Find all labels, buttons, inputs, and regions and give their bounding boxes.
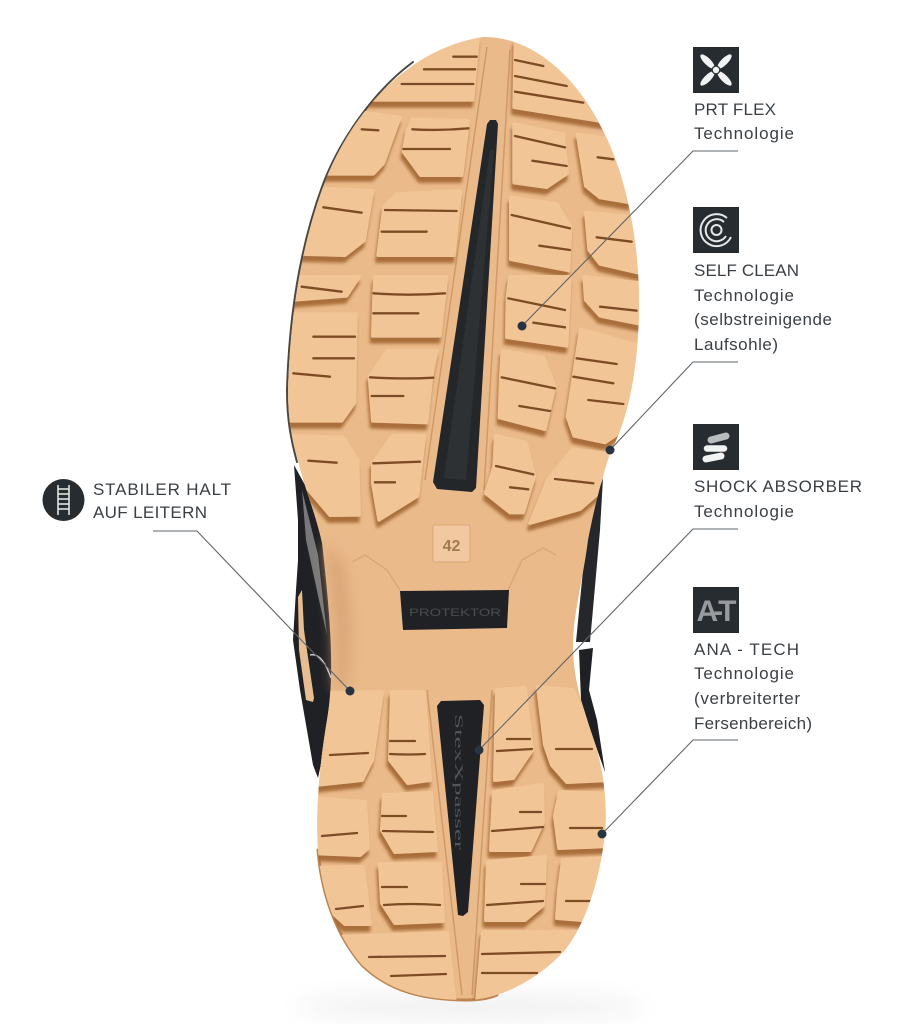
callout: PRT FLEX [518,47,794,330]
midfoot shading [324,540,556,690]
icon: PRT FLEX [693,47,739,93]
label: STABILER HALT: STABILER HALT [93,480,231,499]
black brand badge: PROTEKTOR [409,607,501,619]
label: PRT FLEX [694,100,794,143]
callout: ANA-TECH [598,587,812,838]
heel black spine: StexXpasser [452,714,466,850]
label: SHOCK ABSORBER: SHOCK ABSORBER [694,477,862,496]
size marker 42 [433,525,470,562]
ground shadow [295,997,645,1017]
tread lugs clipped to sole [282,37,643,1005]
label: PRT FLEX: Technologie [694,124,794,143]
forefoot black spine [433,120,498,492]
label: ANA-TECH: ANA - TECH [694,640,799,659]
label: ANA-TECH: (verbreiterter [694,689,800,708]
label: ANA-TECH: Technologie [694,664,794,683]
icon: SHOCK ABSORBER [693,424,739,470]
icon: SELF CLEAN [693,207,739,253]
forefoot tread upper part [293,37,643,274]
label: STABILER HALT [93,480,231,522]
label: PRT FLEX: PRT FLEX [694,100,776,119]
sole outline [288,37,639,1000]
callout: SELF CLEAN [606,207,832,454]
central channel lines [425,47,510,995]
label: SELF CLEAN: Technologie [694,286,794,305]
label: STABILER HALT: AUF LEITERN [93,503,207,522]
sole edge shading [287,62,497,1000]
icon: ANA-TECH [693,587,739,633]
size marker 42: 42 [443,538,460,555]
label: SHOCK ABSORBER [694,477,862,521]
label: ANA-TECH: Fersenbereich) [694,714,812,733]
icon: ladder [42,479,84,521]
heel black spine [437,700,484,916]
label: ANA-TECH [694,640,812,733]
label: SELF CLEAN: SELF CLEAN [694,261,799,280]
heel tread [310,687,612,1005]
label: SELF CLEAN: Laufsohle) [694,335,778,354]
forefoot tread lower part [282,277,643,523]
ladder strap [298,590,314,702]
label: SELF CLEAN: (selbstreinigende [694,310,832,329]
shoe upper visible behind sole [293,465,605,778]
black brand badge [400,590,509,630]
callout: SHOCK ABSORBER [474,424,862,754]
label: SELF CLEAN [694,261,832,354]
label: SHOCK ABSORBER: Technologie [694,502,794,521]
icon: ANA-TECH: A-T [696,595,736,628]
callout: STABILER HALT [42,479,354,696]
